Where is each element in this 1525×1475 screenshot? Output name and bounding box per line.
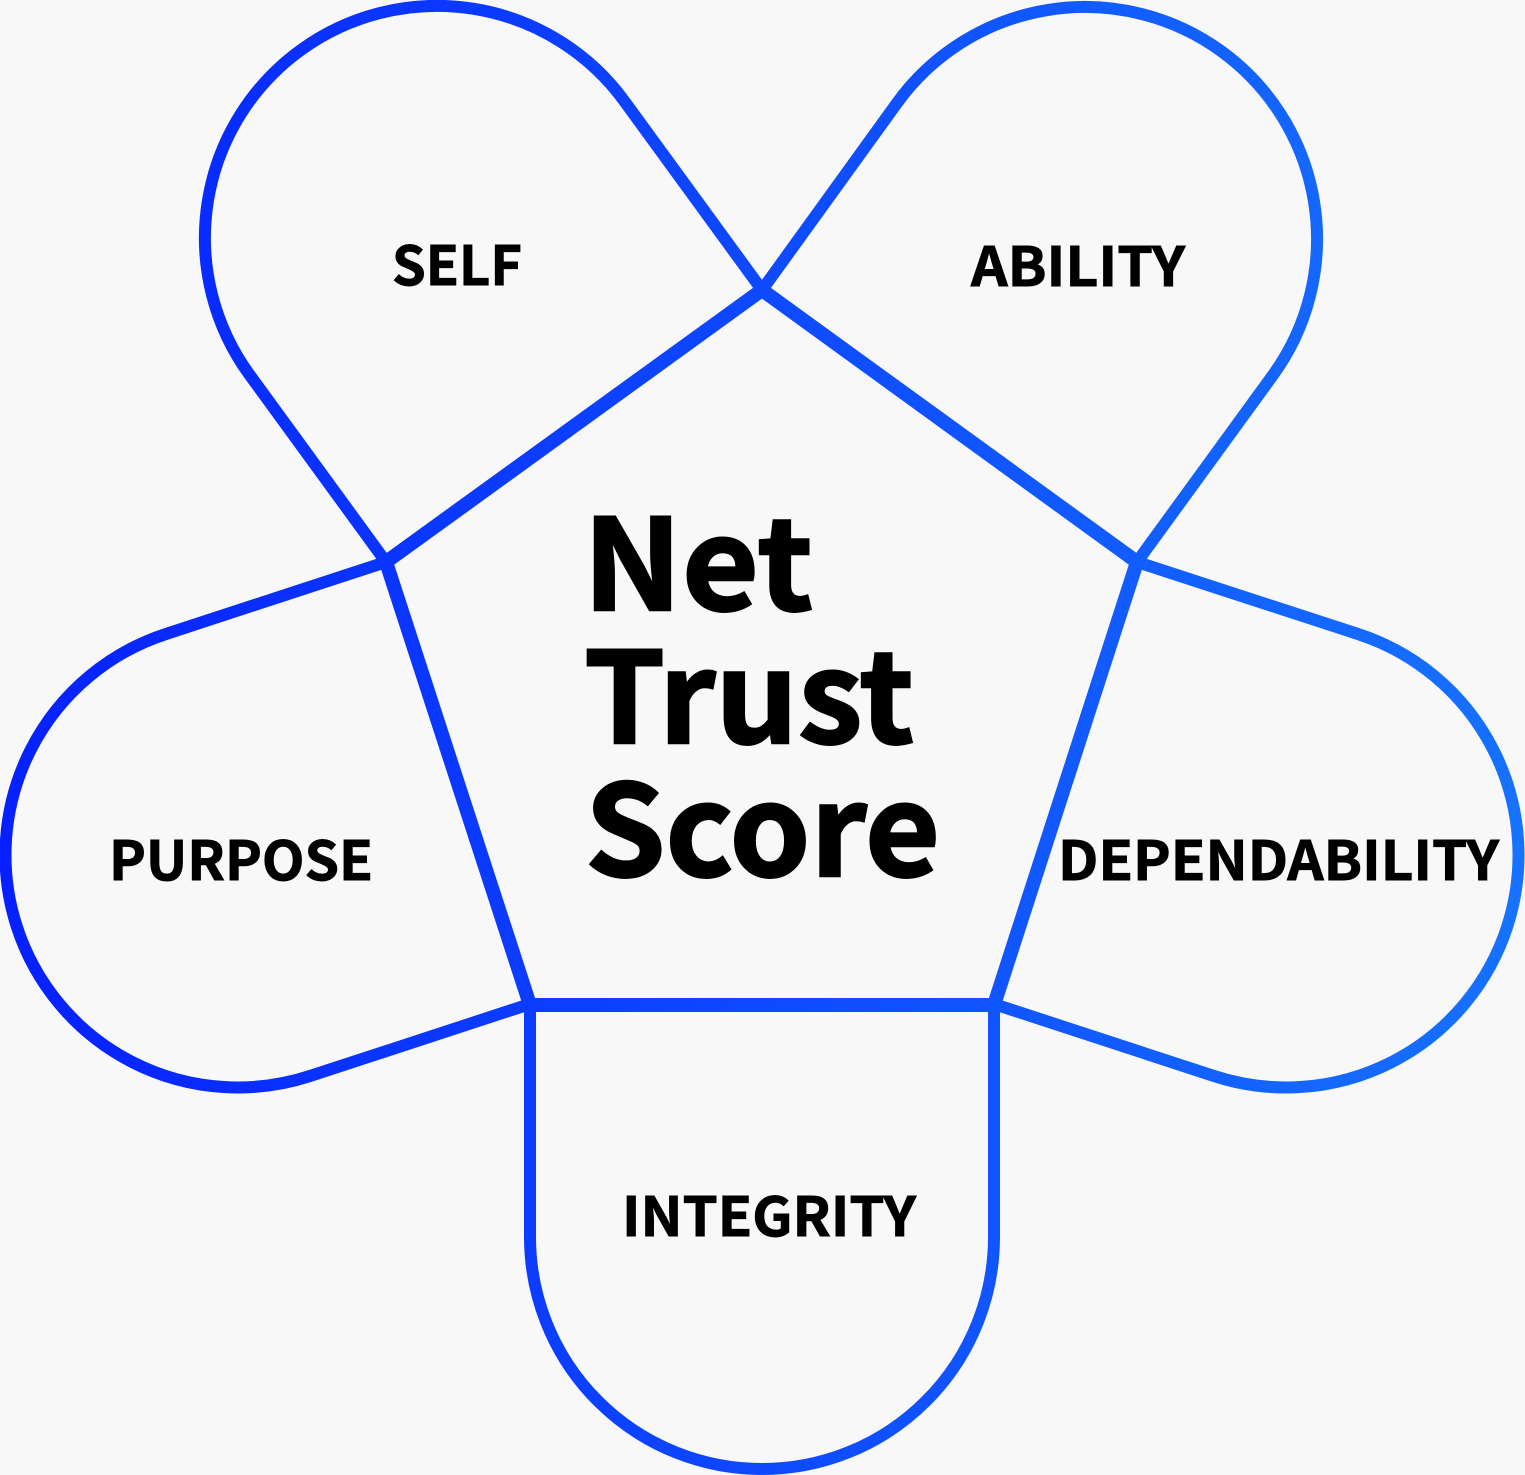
- title: net trust score: Score: [585, 731, 940, 913]
- petal: purpose: [5, 562, 530, 1087]
- petal: ability: [762, 7, 1317, 562]
- petal: dependability: [994, 562, 1519, 1087]
- label: purpose: PURPOSE: [109, 817, 373, 896]
- title: net trust score: Net: [583, 465, 813, 647]
- title: net trust score: Trust: [584, 598, 914, 780]
- central pentagon: [386, 290, 1137, 1005]
- label: self: SELF: [392, 222, 522, 301]
- petal: self: [205, 6, 762, 562]
- petal: integrity: [530, 1004, 994, 1469]
- label: dependability: DEPENDABILITY: [1058, 817, 1500, 896]
- title: net trust score: [583, 465, 940, 913]
- label: ability: ABILITY: [970, 223, 1186, 302]
- label: integrity: INTEGRITY: [622, 1173, 917, 1252]
